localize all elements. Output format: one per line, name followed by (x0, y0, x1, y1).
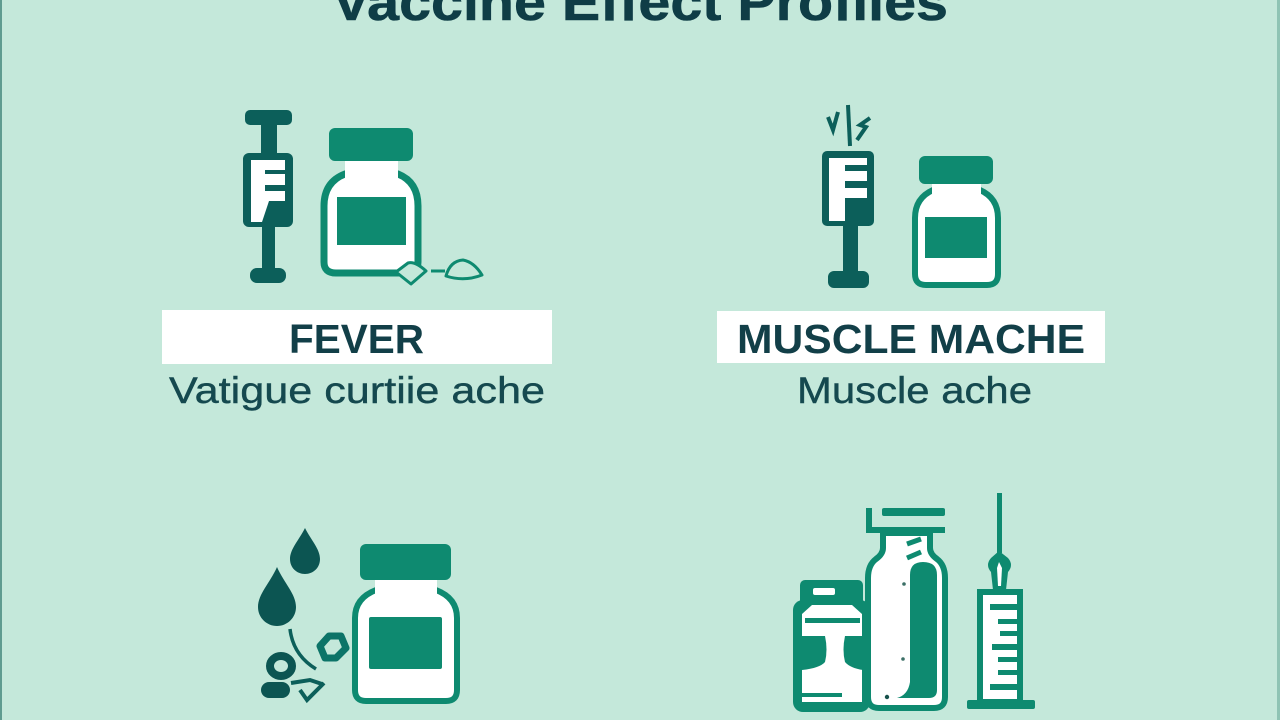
icon: syringe (243, 110, 293, 283)
icon: medicine bottle (355, 544, 457, 701)
icon: pills (396, 260, 482, 284)
icon: syringe (822, 151, 874, 288)
description: fever: Vatigue curtiie ache (169, 370, 545, 411)
panel: fever (162, 110, 552, 411)
icon: small vial (793, 580, 870, 712)
icon: large drop (258, 567, 296, 626)
icon: medicine bottle (915, 156, 998, 285)
panel: drops and pills (258, 528, 457, 701)
label box: muscle mache: MUSCLE MACHE (737, 316, 1085, 362)
panel: vials and syringe (793, 493, 1035, 712)
icon: nerve spark (828, 105, 870, 146)
label box: fever (162, 310, 552, 364)
icon: scattered pills (261, 629, 346, 700)
description: muscle ache: Muscle ache (797, 370, 1032, 411)
icon: small drop (290, 528, 320, 574)
icon: tall syringe (967, 493, 1035, 709)
icon: medicine bottle (324, 128, 418, 273)
panel: muscle ache (717, 105, 1105, 411)
label box: fever: FEVER (289, 316, 424, 362)
icon: large vial (868, 508, 945, 708)
